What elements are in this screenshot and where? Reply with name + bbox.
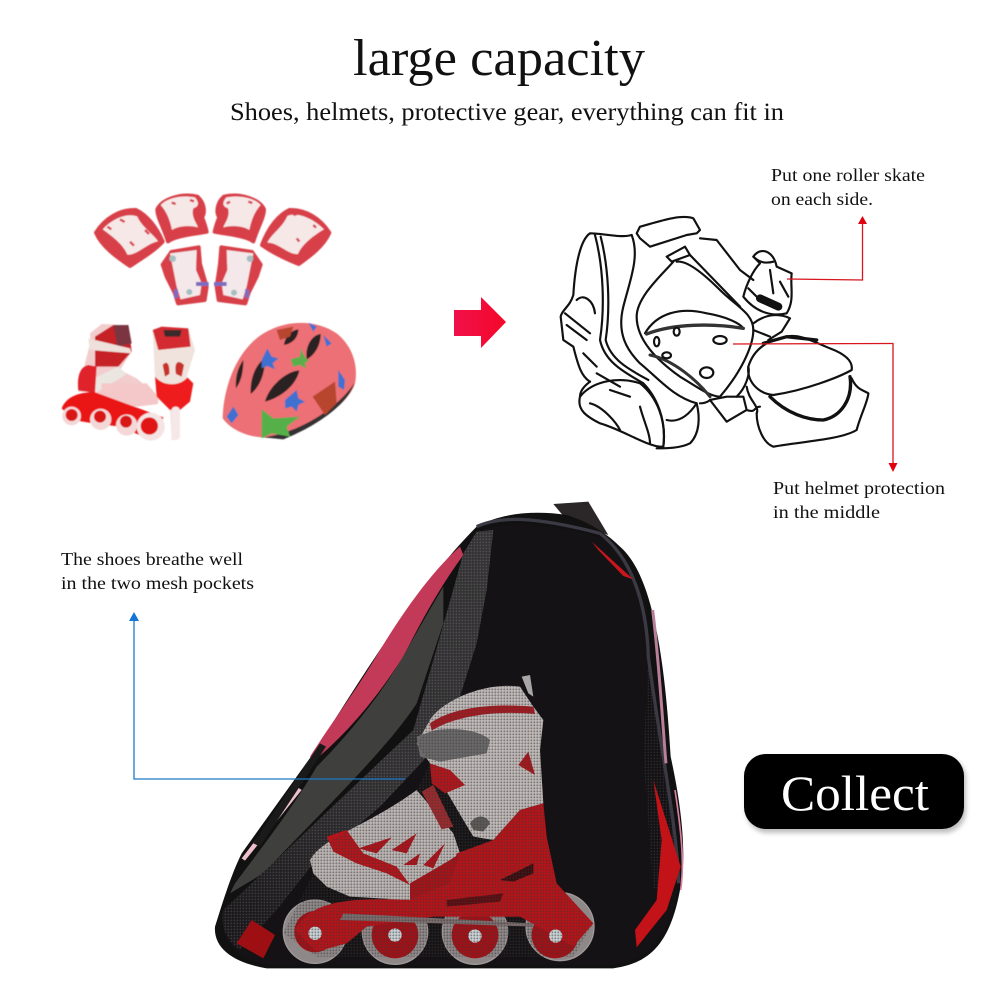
red heel and chassis xyxy=(295,803,593,952)
callout: shoes breathe well xyxy=(61,549,254,593)
callout: helmet protection in the middle xyxy=(773,478,945,522)
collect button: Collect xyxy=(781,765,929,821)
callout: put one skate on each side xyxy=(771,165,925,209)
skate in side pocket xyxy=(743,251,792,340)
bag outline and straps xyxy=(561,217,770,448)
mesh over skate xyxy=(283,686,593,957)
red skate, front view xyxy=(153,327,195,441)
red skate, side view xyxy=(62,324,165,441)
collect button xyxy=(744,754,966,833)
skate in mesh pocket xyxy=(283,675,594,964)
big red arrow xyxy=(454,297,506,348)
helmet pocket xyxy=(747,336,868,447)
boot toe and cuff xyxy=(310,790,460,900)
arrow: red up, to side pocket text xyxy=(787,216,867,280)
callout: helmet protection in the middle: in the middle xyxy=(773,502,880,522)
red arrow from helmet pocket down to text xyxy=(733,344,898,472)
pale strap edge xyxy=(242,787,302,861)
callout: shoes breathe well: in the two mesh pockets xyxy=(61,573,254,593)
bag body xyxy=(215,502,683,968)
strap xyxy=(417,729,490,762)
title: large capacity xyxy=(353,30,645,87)
product photo: triangular skate bag xyxy=(215,502,683,969)
wheels xyxy=(283,893,594,964)
knee and elbow pads xyxy=(96,196,329,303)
callout: put one skate on each side: on each side. xyxy=(771,189,873,209)
subtitle: Shoes, helmets, protective gear, everything can fit in xyxy=(230,99,785,126)
photo: protective pads, roller skates and helmet xyxy=(62,196,356,441)
line drawing: open bag with skates and helmet xyxy=(561,217,868,448)
blue arrow from mesh pocket to text xyxy=(129,612,405,779)
mesh pocket with zipper xyxy=(645,311,743,397)
outer dark silhouette xyxy=(215,513,683,968)
pink star helmet xyxy=(223,323,356,439)
grey side gusset xyxy=(230,587,443,893)
mesh front panel xyxy=(222,519,682,969)
callout: shoes breathe well: The shoes breathe well xyxy=(61,549,243,569)
pink side gusset xyxy=(310,547,463,760)
red trim patches xyxy=(237,542,681,958)
callout: put one skate on each side: Put one roller skate xyxy=(771,165,925,185)
callout: helmet protection in the middle: Put helmet protection xyxy=(773,478,945,498)
